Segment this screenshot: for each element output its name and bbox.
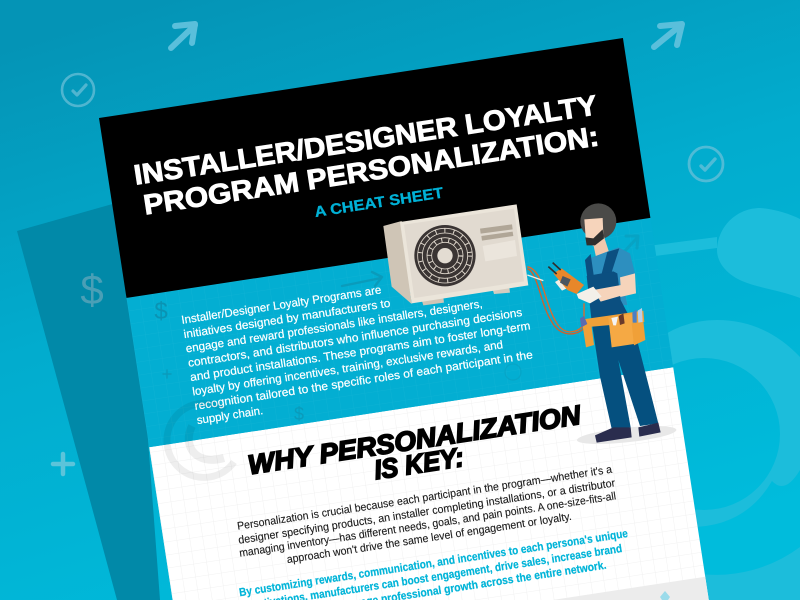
intro text block: initiatives designed by manufacturers to (183, 298, 391, 341)
hair (580, 203, 616, 239)
worker (548, 203, 661, 443)
icon: footer arrow (660, 591, 670, 600)
icon: air conditioner (383, 204, 528, 305)
intro text block (182, 288, 532, 425)
shirt (585, 247, 635, 307)
body text block: managing inventory—has different needs, goals, and pain points. A one-size-fits-all (238, 490, 617, 560)
highlighted text block: By customizing rewards, communication, and incentives to each persona's unique (238, 528, 629, 599)
page (99, 38, 702, 600)
wires (527, 267, 584, 334)
panel: white section (149, 367, 709, 600)
faint band icons (154, 236, 638, 424)
meter hand and glove (555, 278, 571, 291)
panel: footer band (553, 577, 709, 600)
beard (585, 229, 604, 245)
intro text block: loyalty by offering incentives, training, exclusive rewards, and (192, 339, 504, 398)
body text block: designer specifying products, an installer completing installations, or a distributor (237, 477, 616, 547)
illustration group (383, 203, 677, 448)
icon: background arrow right (654, 24, 682, 47)
icon: background dollar: $ (80, 266, 104, 313)
intro text block: and product installations. These programs aim to foster long-term (189, 320, 531, 384)
forearm (596, 273, 636, 302)
subtitle: A CHEAT SHEET (313, 185, 445, 221)
panel: white section grid (149, 367, 709, 600)
background sheet behind page (17, 199, 160, 600)
section heading: IS KEY: (372, 442, 466, 485)
faint band icons: $ (294, 404, 304, 424)
neck (593, 237, 610, 260)
tools (632, 309, 637, 323)
icon: background check left (62, 74, 94, 106)
face (584, 218, 603, 246)
body text block: approach won't drive the same level of engagement or loyalty. (286, 511, 572, 566)
title: PROGRAM PERSONALIZATION: (141, 121, 601, 221)
background swirl shape (628, 208, 800, 600)
title: INSTALLER/DESIGNER LOYALTY (132, 89, 599, 191)
intro text block: engage and reward professionals like installers, designers, (185, 298, 483, 355)
forearm over bib (593, 284, 634, 302)
boots (595, 427, 632, 443)
tool belt (583, 311, 644, 327)
bib and straps (585, 254, 594, 277)
intro text block: supply chain. (196, 405, 264, 427)
icon: background plus (53, 454, 73, 474)
intro text block: contractors, and distributors who influence purchasing decisions (187, 307, 523, 370)
body text block: Personalization is crucial because each participant in the program—whether it's a (236, 464, 614, 533)
watermark swirl (167, 403, 234, 477)
panel: black header (99, 38, 650, 298)
icon: background arrow left (171, 24, 195, 48)
faint band icons: $ (154, 298, 168, 325)
intro text block: Installer/Designer Loyalty Programs are (181, 284, 382, 327)
panel: blue intro section (126, 245, 674, 448)
section heading: WHY PERSONALIZATION (246, 400, 583, 480)
trousers (592, 315, 658, 429)
ground shadow (576, 422, 677, 448)
icon: background check right (689, 147, 723, 181)
intro text block: recognition tailored to the specific roles of each participant in the (194, 349, 534, 413)
